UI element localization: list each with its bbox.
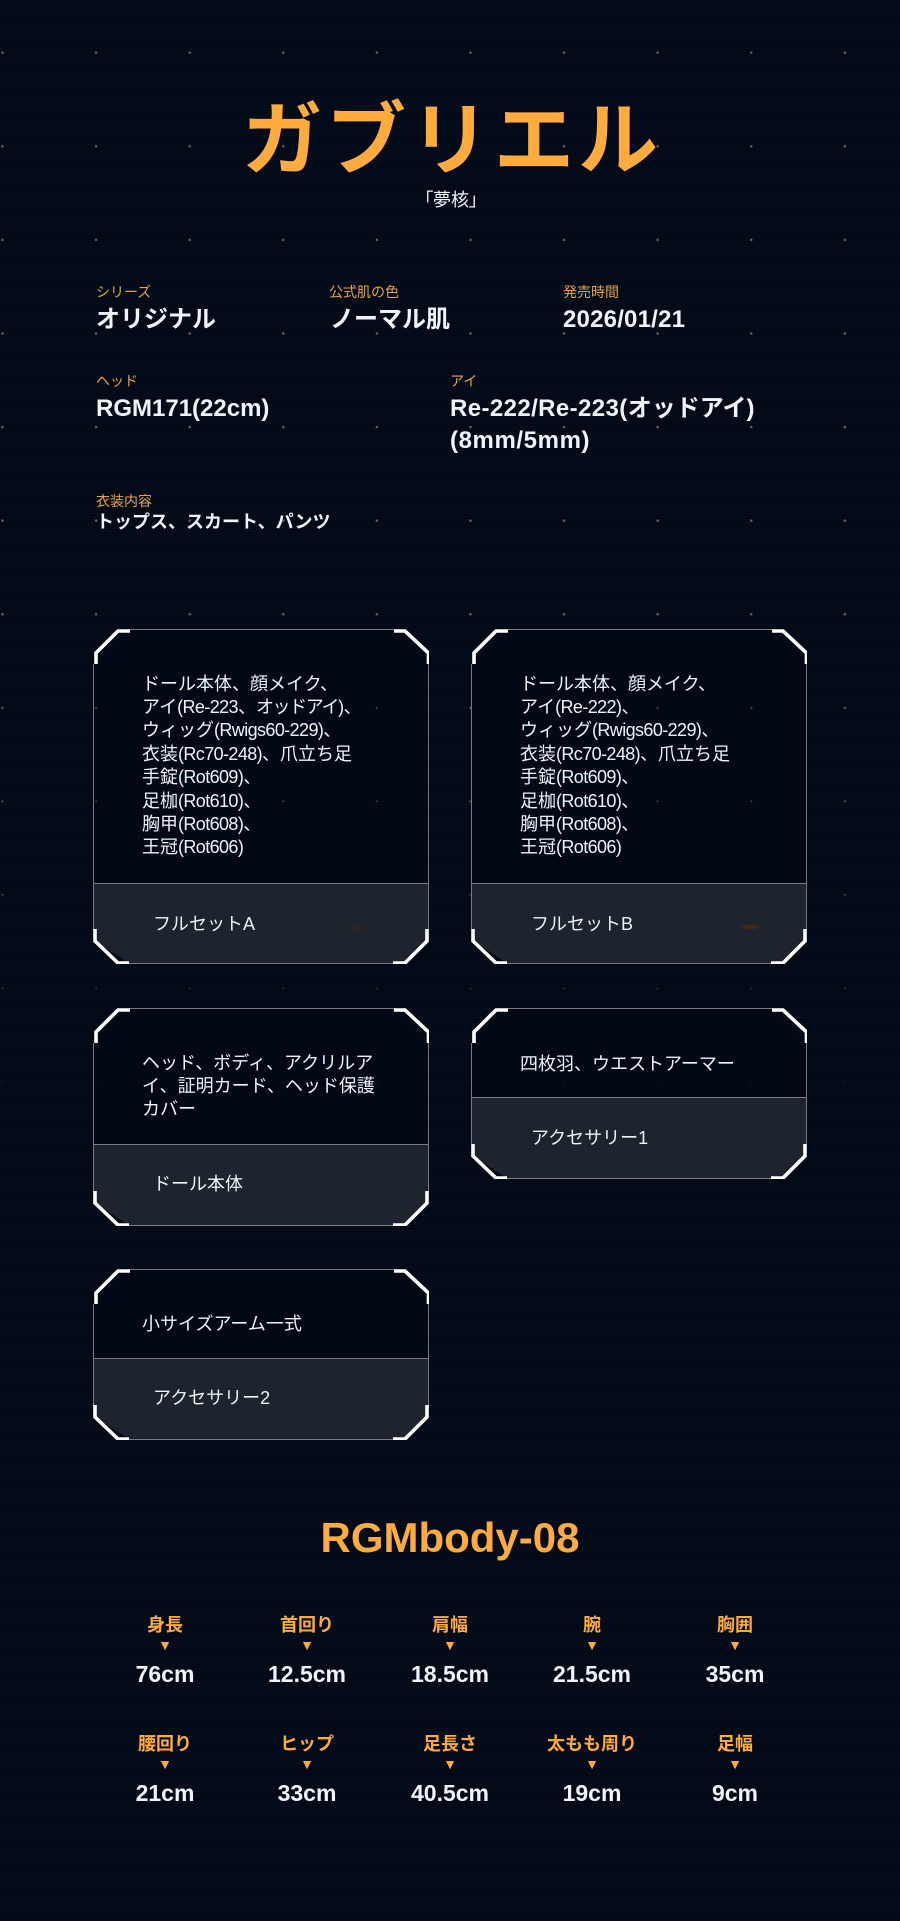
card frame A bbox=[93, 629, 429, 964]
contents A: ドール本体、顔メイク、 bbox=[142, 674, 338, 694]
contents B bbox=[520, 674, 730, 857]
measurement: leg length: 足長さ bbox=[423, 1734, 477, 1754]
measurement: chest: 胸囲 bbox=[717, 1614, 753, 1634]
body measurements grid bbox=[136, 1614, 764, 1806]
measurement: waist: 21cm bbox=[136, 1780, 194, 1806]
measurement: height: 身長 bbox=[147, 1614, 183, 1634]
contents B: 衣装(Rc70-248)、爪立ち足 bbox=[520, 744, 730, 764]
value: eye: (8mm/5mm) bbox=[450, 427, 590, 454]
contents B: ドール本体、顔メイク、 bbox=[520, 674, 716, 694]
label: eye: アイ bbox=[450, 373, 477, 389]
panel: doll body bbox=[93, 1008, 429, 1226]
measurement: arm: ▼ bbox=[585, 1636, 599, 1652]
contents accessory 2: 小サイズアーム一式 bbox=[142, 1314, 302, 1334]
value: eye bbox=[450, 395, 754, 454]
measurement: hip: 33cm bbox=[278, 1780, 336, 1806]
measurement: foot width bbox=[712, 1734, 758, 1806]
contents B: アイ(Re-222)、 bbox=[520, 697, 639, 717]
contents B: ウィッグ(Rwigs60-229)、 bbox=[520, 720, 719, 740]
name B: フルセットB bbox=[531, 914, 633, 934]
contents doll body: カバー bbox=[142, 1099, 196, 1119]
measurement: foot width: 9cm bbox=[712, 1780, 758, 1806]
contents A: 足枷(Rot610)、 bbox=[142, 791, 261, 811]
measurement: shoulder: 18.5cm bbox=[411, 1660, 489, 1686]
measurement: thigh bbox=[547, 1734, 637, 1806]
name accessory 1: アクセサリー1 bbox=[531, 1128, 648, 1148]
contents doll body: イ、証明カード、ヘッド保護 bbox=[142, 1076, 375, 1096]
label: release date: 発売時間 bbox=[563, 284, 619, 300]
card frame accessory 2 bbox=[93, 1269, 429, 1440]
value: release date: 2026/01/21 bbox=[563, 306, 685, 333]
measurement: shoulder bbox=[411, 1614, 489, 1686]
measurement: neck: 首回り bbox=[280, 1614, 334, 1634]
contents B: 王冠(Rot606) bbox=[520, 837, 621, 857]
measurement: leg length: 40.5cm bbox=[411, 1780, 489, 1806]
value: head: RGM171(22cm) bbox=[96, 395, 269, 422]
panel: accessory 1 bbox=[471, 1008, 807, 1179]
measurement: waist: 腰回り bbox=[138, 1734, 192, 1754]
measurement: chest: ▼ bbox=[728, 1636, 742, 1652]
contents A: 王冠(Rot606) bbox=[142, 837, 243, 857]
measurement: leg length: ▼ bbox=[443, 1756, 457, 1772]
measurement: thigh: ▼ bbox=[585, 1756, 599, 1772]
contents doll body bbox=[142, 1052, 375, 1119]
measurement: shoulder: ▼ bbox=[443, 1636, 457, 1652]
background dot grid bbox=[1, 51, 846, 1084]
measurement: height bbox=[136, 1614, 194, 1686]
measurement: leg length bbox=[411, 1734, 489, 1806]
value: series: オリジナル bbox=[96, 306, 216, 333]
info block: release date bbox=[563, 284, 685, 333]
contents A: 衣装(Rc70-248)、爪立ち足 bbox=[142, 744, 352, 764]
contents A: 手錠(Rot609)、 bbox=[142, 767, 261, 787]
measurement: neck: ▼ bbox=[300, 1636, 314, 1652]
measurement: chest bbox=[706, 1614, 764, 1686]
contents B: 手錠(Rot609)、 bbox=[520, 767, 639, 787]
value: eye: Re-222/Re-223(オッドアイ) bbox=[450, 395, 754, 422]
panel: full set B bbox=[471, 629, 807, 964]
contents A: ウィッグ(Rwigs60-229)、 bbox=[142, 720, 341, 740]
name A: フルセットA bbox=[153, 914, 255, 934]
info block: series bbox=[96, 284, 216, 333]
name accessory 2: アクセサリー2 bbox=[153, 1388, 270, 1408]
card frame accessory 1 bbox=[471, 1008, 807, 1179]
card frame doll body bbox=[93, 1008, 429, 1226]
label: outfit: 衣装内容 bbox=[96, 492, 152, 508]
measurement: neck bbox=[268, 1614, 346, 1686]
subtitle: 「夢核」 bbox=[424, 190, 478, 210]
measurement: hip: ▼ bbox=[300, 1756, 314, 1772]
section heading: RGMbody-08 bbox=[320, 1514, 580, 1561]
contents A: 胸甲(Rot608)、 bbox=[142, 814, 261, 834]
measurement: neck: 12.5cm bbox=[268, 1660, 346, 1686]
contents B: 胸甲(Rot608)、 bbox=[520, 814, 639, 834]
measurement: shoulder: 肩幅 bbox=[432, 1614, 468, 1634]
info block: head bbox=[96, 373, 269, 422]
measurement: thigh: 19cm bbox=[563, 1780, 621, 1806]
measurement: thigh: 太もも周り bbox=[547, 1734, 637, 1754]
measurement: foot width: ▼ bbox=[728, 1756, 742, 1772]
label: head: ヘッド bbox=[96, 373, 138, 389]
measurement: hip bbox=[278, 1734, 336, 1806]
measurement: hip: ヒップ bbox=[280, 1734, 334, 1754]
label: series: シリーズ bbox=[96, 284, 151, 300]
measurement: arm bbox=[553, 1614, 631, 1686]
contents A: アイ(Re-223、オッドアイ)、 bbox=[142, 697, 361, 717]
value: skin color: ノーマル肌 bbox=[330, 306, 450, 333]
info block: skin color bbox=[329, 284, 450, 333]
measurement: foot width: 足幅 bbox=[717, 1734, 753, 1754]
measurement: height: 76cm bbox=[136, 1660, 194, 1686]
contents A bbox=[142, 674, 361, 857]
measurement: waist bbox=[136, 1734, 194, 1806]
contents B: 足枷(Rot610)、 bbox=[520, 791, 639, 811]
panel: accessory 2 bbox=[93, 1269, 429, 1440]
measurement: arm: 腕 bbox=[583, 1614, 601, 1634]
title: ガブリエル bbox=[242, 96, 662, 184]
panel: full set A bbox=[93, 629, 429, 964]
info block: eye bbox=[450, 373, 754, 454]
contents doll body: ヘッド、ボディ、アクリルア bbox=[142, 1052, 373, 1072]
measurement: chest: 35cm bbox=[706, 1660, 764, 1686]
label: skin color: 公式肌の色 bbox=[329, 284, 399, 300]
name doll body: ドール本体 bbox=[153, 1174, 243, 1194]
value: outfit: トップス、スカート、パンツ bbox=[96, 512, 331, 532]
info block: outfit bbox=[96, 492, 331, 532]
measurement: waist: ▼ bbox=[158, 1756, 172, 1772]
measurement: arm: 21.5cm bbox=[553, 1660, 631, 1686]
card frame B bbox=[471, 629, 807, 964]
contents accessory 1: 四枚羽、ウエストアーマー bbox=[520, 1054, 735, 1074]
measurement: height: ▼ bbox=[158, 1636, 172, 1652]
